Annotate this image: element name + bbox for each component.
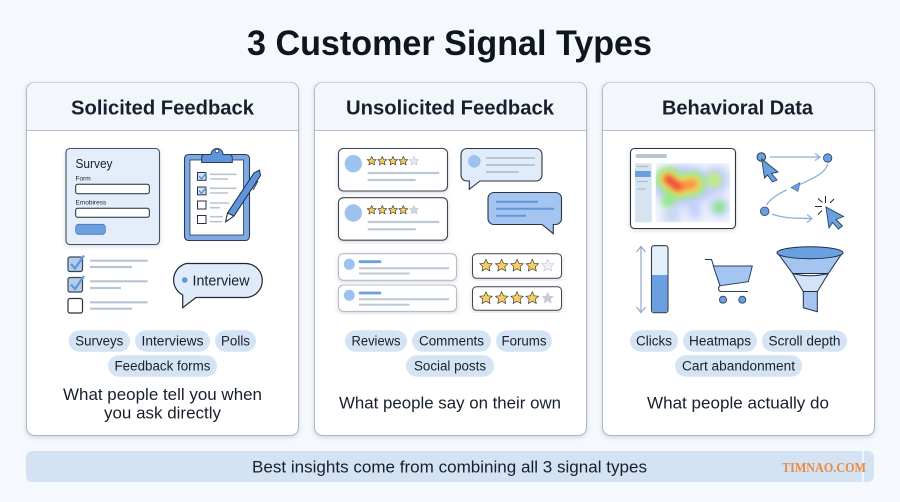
icon: survey form: Form <box>76 176 91 183</box>
panel: unsolicited feedback <box>314 82 586 436</box>
panel: solicited feedback <box>26 82 298 436</box>
tags: behavioral data: Clicks <box>636 334 672 349</box>
star rating boxes <box>472 254 562 310</box>
icon: interview speech bubble: Interview <box>192 274 250 290</box>
tags: solicited feedback: Surveys <box>75 334 124 349</box>
tags: behavioral data <box>630 330 847 377</box>
icon: survey form <box>66 148 160 244</box>
tags: unsolicited feedback <box>345 330 552 377</box>
tags: solicited feedback: Feedback forms <box>114 359 211 374</box>
tags: solicited feedback <box>69 330 256 377</box>
panel header: solicited feedback <box>27 82 298 130</box>
icon: interview speech bubble <box>174 264 262 308</box>
icon: checklist <box>68 256 148 313</box>
panel: behavioral data <box>602 82 874 436</box>
tags: behavioral data: Cart abandonment <box>682 359 795 374</box>
panel header: unsolicited feedback <box>315 82 586 130</box>
panel header: solicited feedback: Solicited Feedback <box>71 96 255 120</box>
icon: scroll depth <box>636 246 668 313</box>
review cards with stars <box>338 148 448 240</box>
title: 3 Customer Signal Types <box>247 24 652 63</box>
panel header: behavioral data <box>603 82 874 130</box>
icon: clipboard with pen <box>184 148 260 240</box>
banner text: Best insights come from combining all 3 signal types <box>252 458 647 476</box>
icon: survey form: Survey <box>76 156 113 171</box>
description: behavioral data: What people actually do <box>647 394 829 412</box>
icon: click path with cursors <box>757 153 844 229</box>
tags: unsolicited feedback: Forums <box>502 334 547 349</box>
tags: unsolicited feedback: Comments <box>419 334 484 349</box>
bottom banner <box>26 451 874 482</box>
tags: behavioral data: Heatmaps <box>689 334 751 349</box>
description: solicited feedback <box>63 385 262 423</box>
tags: behavioral data: Scroll depth <box>768 334 840 349</box>
tags: unsolicited feedback: Reviews <box>352 334 401 349</box>
speech bubbles <box>461 148 562 234</box>
description: solicited feedback: What people tell you when <box>63 385 262 404</box>
icon: funnel <box>777 247 843 312</box>
heatmap window <box>630 148 736 228</box>
description: unsolicited feedback: What people say on their own <box>339 394 561 412</box>
icon: shopping cart <box>705 260 752 303</box>
tags: solicited feedback: Polls <box>221 334 250 349</box>
comment cards <box>338 254 456 311</box>
icon: survey form: Emobiress <box>76 200 107 206</box>
panel header: behavioral data: Behavioral Data <box>662 96 814 120</box>
tags: unsolicited feedback: Social posts <box>414 359 486 374</box>
watermark: TIMNAO.COM <box>782 460 866 475</box>
panel header: unsolicited feedback: Unsolicited Feedback <box>346 96 555 120</box>
tags: solicited feedback: Interviews <box>142 334 204 349</box>
description: solicited feedback: you ask directly <box>104 404 221 423</box>
